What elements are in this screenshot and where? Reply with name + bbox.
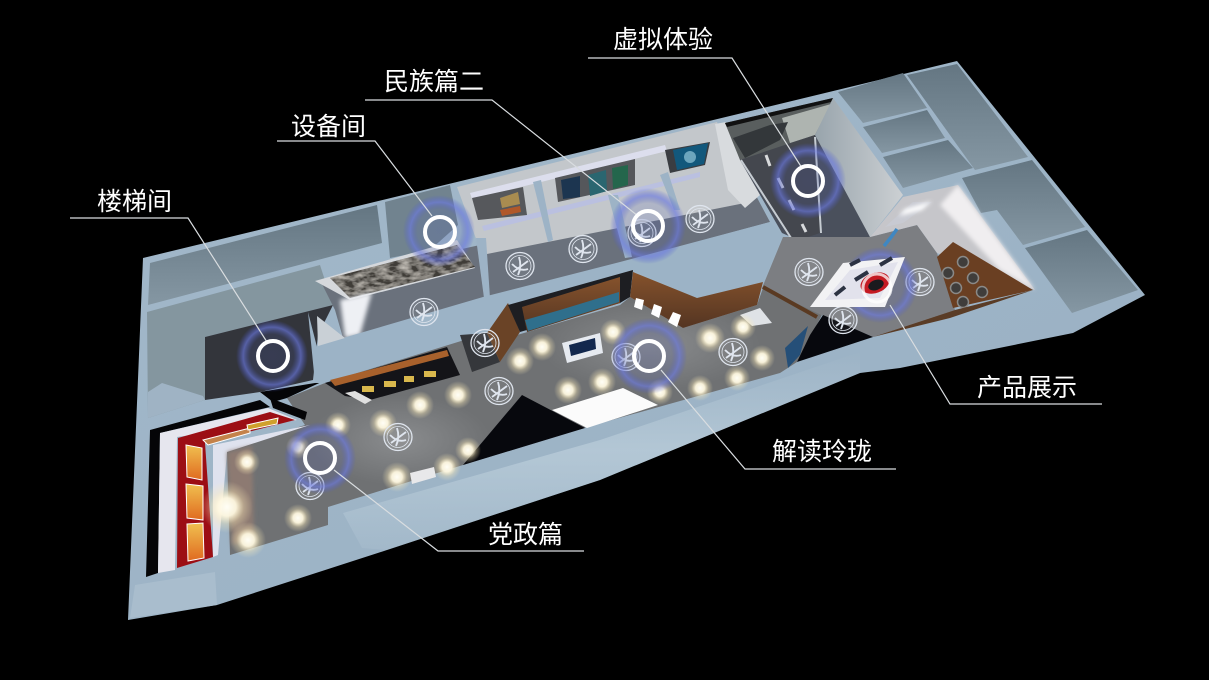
- black void triangle right: [797, 315, 873, 362]
- equipment room: [385, 185, 458, 258]
- product platform with car: [810, 257, 905, 307]
- VR experience room: [725, 98, 903, 250]
- marker rings: [258, 166, 823, 473]
- left display wall: [325, 347, 460, 404]
- label: virtual experience: 虚拟体验: [613, 26, 713, 54]
- rear media wall: [508, 270, 633, 332]
- striped wall: [815, 98, 903, 237]
- visitor figure: [884, 229, 897, 246]
- road scene wall: [725, 98, 833, 160]
- screen panel centre: [555, 159, 635, 202]
- red wall posters: [186, 418, 278, 561]
- gallery room: ethnic section: [315, 122, 793, 338]
- mural wall: [315, 240, 475, 300]
- right doorway light: [740, 308, 772, 326]
- bottom warm edge: [873, 290, 1033, 337]
- building shell: [128, 61, 1145, 620]
- stair rooms upper left: [147, 205, 382, 418]
- hall spot lights: [201, 314, 775, 558]
- leader lines: [70, 58, 1102, 551]
- screen panel right: [665, 142, 710, 173]
- wood tyre wall: [937, 242, 1033, 308]
- label: product display: 产品展示: [977, 374, 1077, 402]
- label: stairwell: 楼梯间: [97, 188, 172, 216]
- lower exterior wall highlight: [343, 352, 860, 550]
- black strip under corridor wall: [260, 378, 330, 402]
- label: ethnic section two: 民族篇二: [384, 68, 484, 96]
- wood angled wall: [487, 303, 520, 362]
- white block floor: [552, 388, 658, 428]
- ceiling light panel: [885, 202, 932, 227]
- party section room: [146, 398, 310, 577]
- brown angled wall with white panels: [630, 272, 763, 328]
- wide corridor wall band: [308, 222, 783, 383]
- corridor end interior: [317, 316, 345, 346]
- road floor: [740, 135, 820, 242]
- main exhibition hall floor: [227, 270, 873, 555]
- label: interpreting Linglong: 解读玲珑: [772, 438, 872, 466]
- storage rooms upper right: [838, 64, 1138, 313]
- kiosk centre: [562, 333, 603, 363]
- stairwell dark floor: [205, 305, 333, 400]
- blue marker glows: [236, 143, 918, 494]
- label: party section: 党政篇: [488, 521, 563, 549]
- product display room: [762, 185, 1035, 337]
- label: equipment room: 设备间: [291, 113, 366, 141]
- screen panel left: [472, 187, 527, 220]
- kiosk bottom: [410, 467, 436, 484]
- gallery partition walls: [476, 122, 793, 298]
- black void triangle left: [463, 395, 585, 465]
- floor medallions: [296, 206, 934, 500]
